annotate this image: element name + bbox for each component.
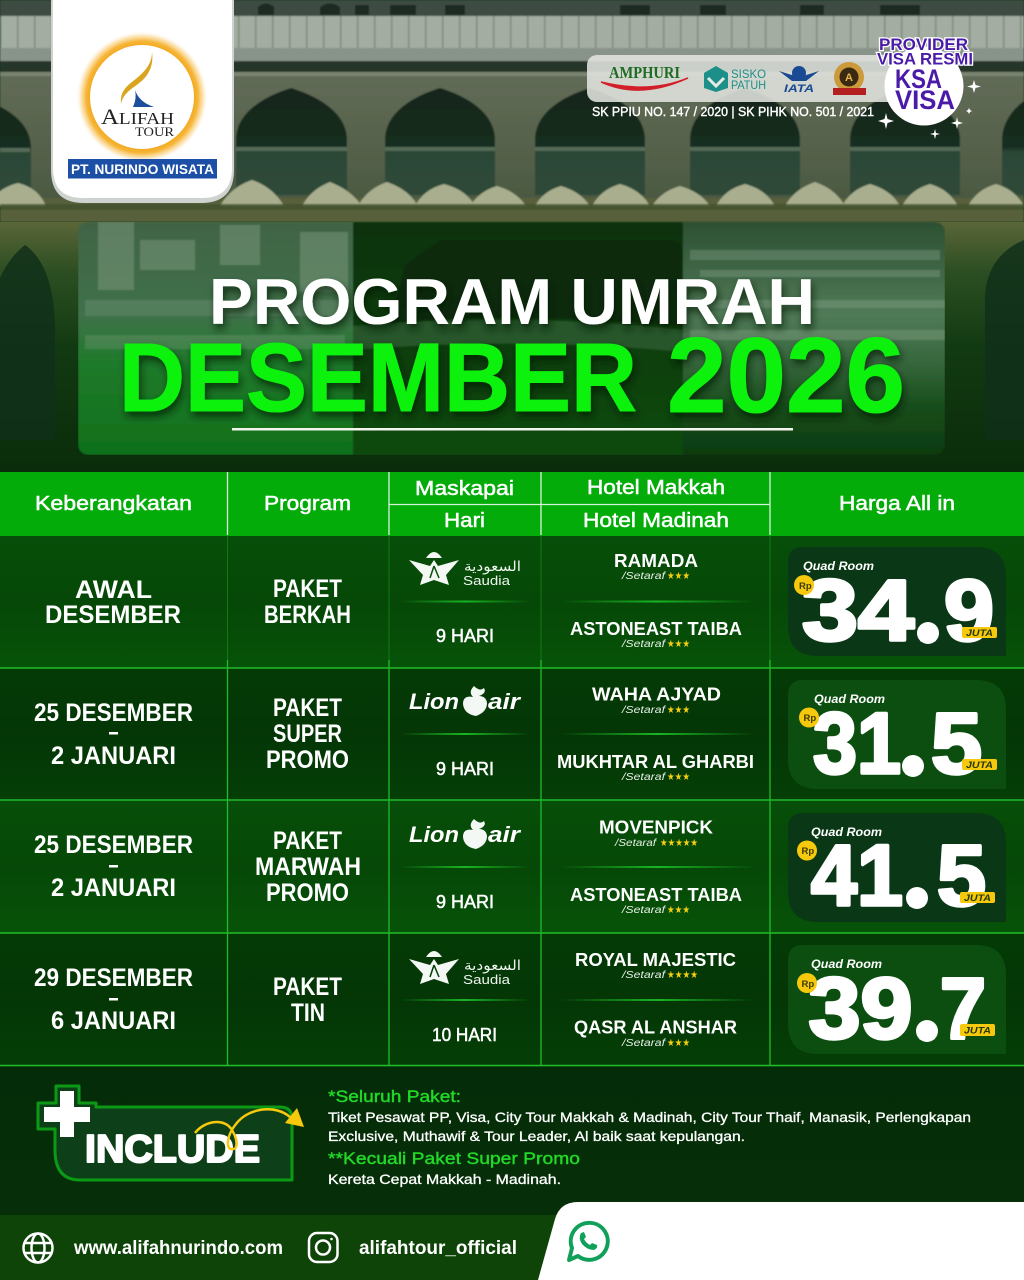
hotel madinah (570, 618, 742, 650)
hotel makkah: /Setaraf (621, 970, 666, 981)
departure date: 29 DESEMBER (34, 964, 193, 992)
hotel makkah (592, 684, 721, 716)
program name (273, 973, 342, 1027)
hotel madinah: /Setaraf (621, 905, 666, 916)
table row backgrounds and grid (0, 536, 1024, 1066)
KSA wordmark: KSA (895, 64, 942, 94)
price card: 7 (940, 961, 986, 1057)
hotel madinah: ASTONEAST TAIBA (570, 884, 742, 905)
hotel madinah: /Setaraf (621, 1038, 666, 1049)
airline logo: Lion Air: Lion (409, 689, 459, 714)
badge heading line 1: PROVIDER (879, 36, 968, 54)
price card: . (905, 828, 929, 924)
departure date: 25 DESEMBER (34, 831, 193, 859)
price card: 9 (944, 563, 994, 659)
price card: Quad Room (811, 957, 882, 971)
icon: instagram (309, 1233, 338, 1262)
departure date (34, 699, 193, 770)
price card: Rp (804, 713, 816, 724)
price card: Quad Room (803, 559, 874, 573)
departure date: AWAL (75, 576, 152, 604)
price card: JUTA (966, 760, 993, 771)
logo: Sisko Patuh: PATUH (731, 78, 766, 92)
hotel makkah: /Setaraf (621, 705, 666, 716)
header: harga all in: Harga All in (839, 493, 955, 515)
license numbers: SK PPIU NO. 147 / 2020 | SK PIHK NO. 501 / 2021 (592, 105, 874, 119)
header: maskapai: Maskapai (415, 478, 514, 500)
website: www.alifahnurindo.com (73, 1238, 283, 1259)
departure date: 25 DESEMBER (34, 699, 193, 727)
background: lower mosque wall behind the title (0, 222, 1024, 472)
title (119, 265, 905, 435)
program name: TIN (291, 999, 325, 1027)
exception detail: Kereta Cepat Makkah - Madinah. (328, 1171, 561, 1187)
header: hotel madinah: Hotel Madinah (583, 510, 729, 532)
duration: 9 HARI (436, 892, 494, 912)
hotel makkah: ★★★ (667, 571, 690, 582)
price card: 41 (811, 828, 903, 924)
divider (560, 733, 755, 735)
hotel madinah (557, 751, 754, 783)
subheading: all packages: *Seluruh Paket: (328, 1087, 461, 1106)
inclusion list: Exclusive, Muthawif & Tour Leader, Al baik saat kepulangan. (328, 1128, 745, 1144)
price card: 34 (802, 563, 914, 659)
airline logo: Lion Air: air (488, 689, 522, 714)
price card: 5 (937, 828, 986, 924)
price card: . (915, 961, 939, 1057)
price card: 31 (813, 696, 901, 792)
program name: MARWAH (255, 853, 361, 881)
airline logo: Saudia: Saudia (463, 573, 511, 588)
price card: JUTA (966, 628, 993, 639)
heading: desember: DESEMBER (119, 323, 637, 432)
program name: PROMO (266, 879, 349, 907)
program name: SUPER (273, 720, 342, 748)
price card (788, 547, 1006, 659)
hotel makkah: ★★★ (667, 705, 690, 716)
duration: 9 HARI (436, 759, 494, 779)
logo: Amphuri (601, 63, 688, 90)
hotel makkah: /Setaraf (614, 838, 657, 849)
departure date: 2 JANUARI (51, 874, 176, 902)
hotel makkah: MOVENPICK (599, 816, 714, 838)
price card: Quad Room (814, 692, 885, 706)
logo card: Alifah Tour (51, 0, 234, 203)
program name: PROMO (266, 746, 349, 774)
airline logo: Saudia: Saudia (463, 972, 511, 987)
header: keberangkatan: Keberangkatan (35, 493, 192, 515)
table header (0, 472, 1024, 536)
airline logo: Lion Air: Lion (409, 822, 459, 847)
logo: accreditation seal (833, 62, 866, 95)
departure date: DESEMBER (45, 601, 181, 629)
price card: . (901, 696, 925, 792)
program name: PAKET (273, 694, 342, 722)
logo: Sisko Patuh: SISKO (731, 67, 766, 81)
accreditation strip (587, 55, 927, 102)
airline logo: Lion Air: air (488, 822, 522, 847)
hotel madinah: ★★★ (667, 905, 690, 916)
hotel makkah: ROYAL MAJESTIC (575, 949, 736, 970)
heading: 2026: 2026 (667, 315, 905, 435)
divider (560, 866, 755, 868)
duration: 10 HARI (432, 1025, 497, 1045)
hotel makkah: /Setaraf (621, 571, 666, 582)
hotel madinah: QASR AL ANSHAR (574, 1016, 737, 1038)
divider (400, 999, 530, 1001)
badge: KSA visa provider (877, 36, 981, 139)
price card: Rp (799, 581, 812, 592)
price card: 39 (808, 961, 912, 1057)
hotel makkah (614, 550, 698, 582)
airline logo: Lion Air (409, 686, 522, 716)
price card: . (916, 563, 940, 659)
icon: plus (44, 1091, 90, 1137)
logo subword: TOUR (135, 124, 174, 139)
include details (328, 1087, 971, 1187)
divider (560, 600, 755, 602)
duration: 9 HARI (436, 626, 494, 646)
row 4: 29 desember to 6 januari, paket tin (34, 945, 1006, 1057)
logo: IATA (779, 66, 819, 95)
logo: accreditation seal: A (845, 72, 853, 84)
header: hari: Hari (444, 510, 485, 532)
hotel madinah: ASTONEAST TAIBA (570, 618, 742, 639)
departure date (34, 964, 193, 1035)
departure date: 6 JANUARI (51, 1007, 176, 1035)
hotel makkah: WAHA AJYAD (592, 684, 721, 704)
divider (560, 999, 755, 1001)
title backdrop panel with Kaaba photo (78, 222, 945, 455)
airline logo: Saudia (409, 951, 521, 987)
hotel madinah: /Setaraf (621, 772, 666, 783)
hotel makkah: RAMADA (614, 550, 698, 571)
hotel madinah: /Setaraf (621, 639, 666, 650)
price card: JUTA (964, 1026, 991, 1036)
divider (400, 600, 530, 602)
price card: Quad Room (811, 825, 882, 839)
hotel madinah (570, 884, 742, 916)
footer bar (0, 1202, 1024, 1280)
program name (255, 827, 361, 907)
include badge (38, 1086, 304, 1180)
icon: globe (24, 1234, 52, 1262)
whatsapp tab (538, 1202, 1024, 1280)
icon: whatsapp (569, 1223, 608, 1260)
inclusion list (328, 1109, 971, 1144)
instagram handle: alifahtour_official (359, 1238, 517, 1259)
hotel makkah: ★★★★ (667, 970, 698, 981)
badge heading line 2: VISA RESMI (877, 50, 973, 68)
divider (400, 733, 530, 735)
price card (788, 680, 1006, 792)
row 3: 25 desember to 2 januari, marwah promo (34, 813, 1006, 924)
header: program: Program (264, 493, 351, 515)
program name: PAKET (273, 973, 342, 1001)
sparkles (878, 80, 981, 139)
price card: 5 (931, 696, 982, 792)
company banner: PT. NURINDO WISATA (71, 161, 214, 177)
airline logo: Saudia (409, 552, 521, 588)
departure date: 2 JANUARI (51, 742, 176, 770)
row 2: 25 desember to 2 januari, super promo (34, 680, 1006, 792)
divider (400, 866, 530, 868)
title underline (232, 428, 793, 430)
include section background (0, 1067, 1024, 1215)
VISA wordmark: VISA (895, 85, 955, 115)
header: hotel makkah: Hotel Makkah (587, 477, 725, 499)
background photo: mosque arcade (0, 0, 1024, 222)
departure date (34, 831, 193, 902)
hotel madinah (574, 1016, 737, 1049)
hotel makkah: ★★★★★ (660, 838, 698, 849)
airline logo: Lion Air (409, 819, 522, 849)
icon: blue sail (133, 90, 154, 107)
program name (264, 575, 351, 629)
logo: IATA: IATA (784, 83, 814, 95)
heading: program umrah: PROGRAM UMRAH (209, 265, 815, 338)
price card: Rp (802, 979, 814, 990)
price card (788, 945, 1006, 1057)
airline logo: Saudia: السعودية (464, 958, 521, 974)
price card: Rp (802, 846, 814, 857)
hotel madinah: ★★★ (667, 772, 690, 783)
hotel madinah: ★★★ (667, 1038, 690, 1049)
airline logo: Saudia: السعودية (464, 559, 521, 575)
program name: BERKAH (264, 601, 351, 629)
program name: PAKET (273, 575, 342, 603)
row 1: awal desember (45, 547, 1006, 659)
hotel makkah (575, 949, 736, 981)
hotel madinah: MUKHTAR AL GHARBI (557, 751, 754, 772)
price card: JUTA (964, 893, 991, 904)
arrow: yellow loop (195, 1108, 304, 1149)
include wordmark: INCLUDE (85, 1128, 260, 1171)
logo: Sisko Patuh (704, 66, 766, 92)
program name: PAKET (273, 827, 342, 855)
hotel madinah: ★★★ (667, 639, 690, 650)
program name (266, 694, 349, 774)
logo wordmark: ALIFAH (101, 104, 174, 129)
subheading: exception: **Kecuali Paket Super Promo (328, 1149, 580, 1168)
icon: gold alif swoosh (121, 52, 152, 104)
inclusion list: Tiket Pesawat PP, Visa, City Tour Makkah & Madinah, City Tour Thaif, Manasik, Perlengkapan (328, 1109, 971, 1125)
logo: Amphuri: AMPHURI (609, 63, 680, 82)
hotel makkah (599, 816, 714, 849)
departure date (45, 576, 181, 629)
price card (788, 813, 1006, 924)
